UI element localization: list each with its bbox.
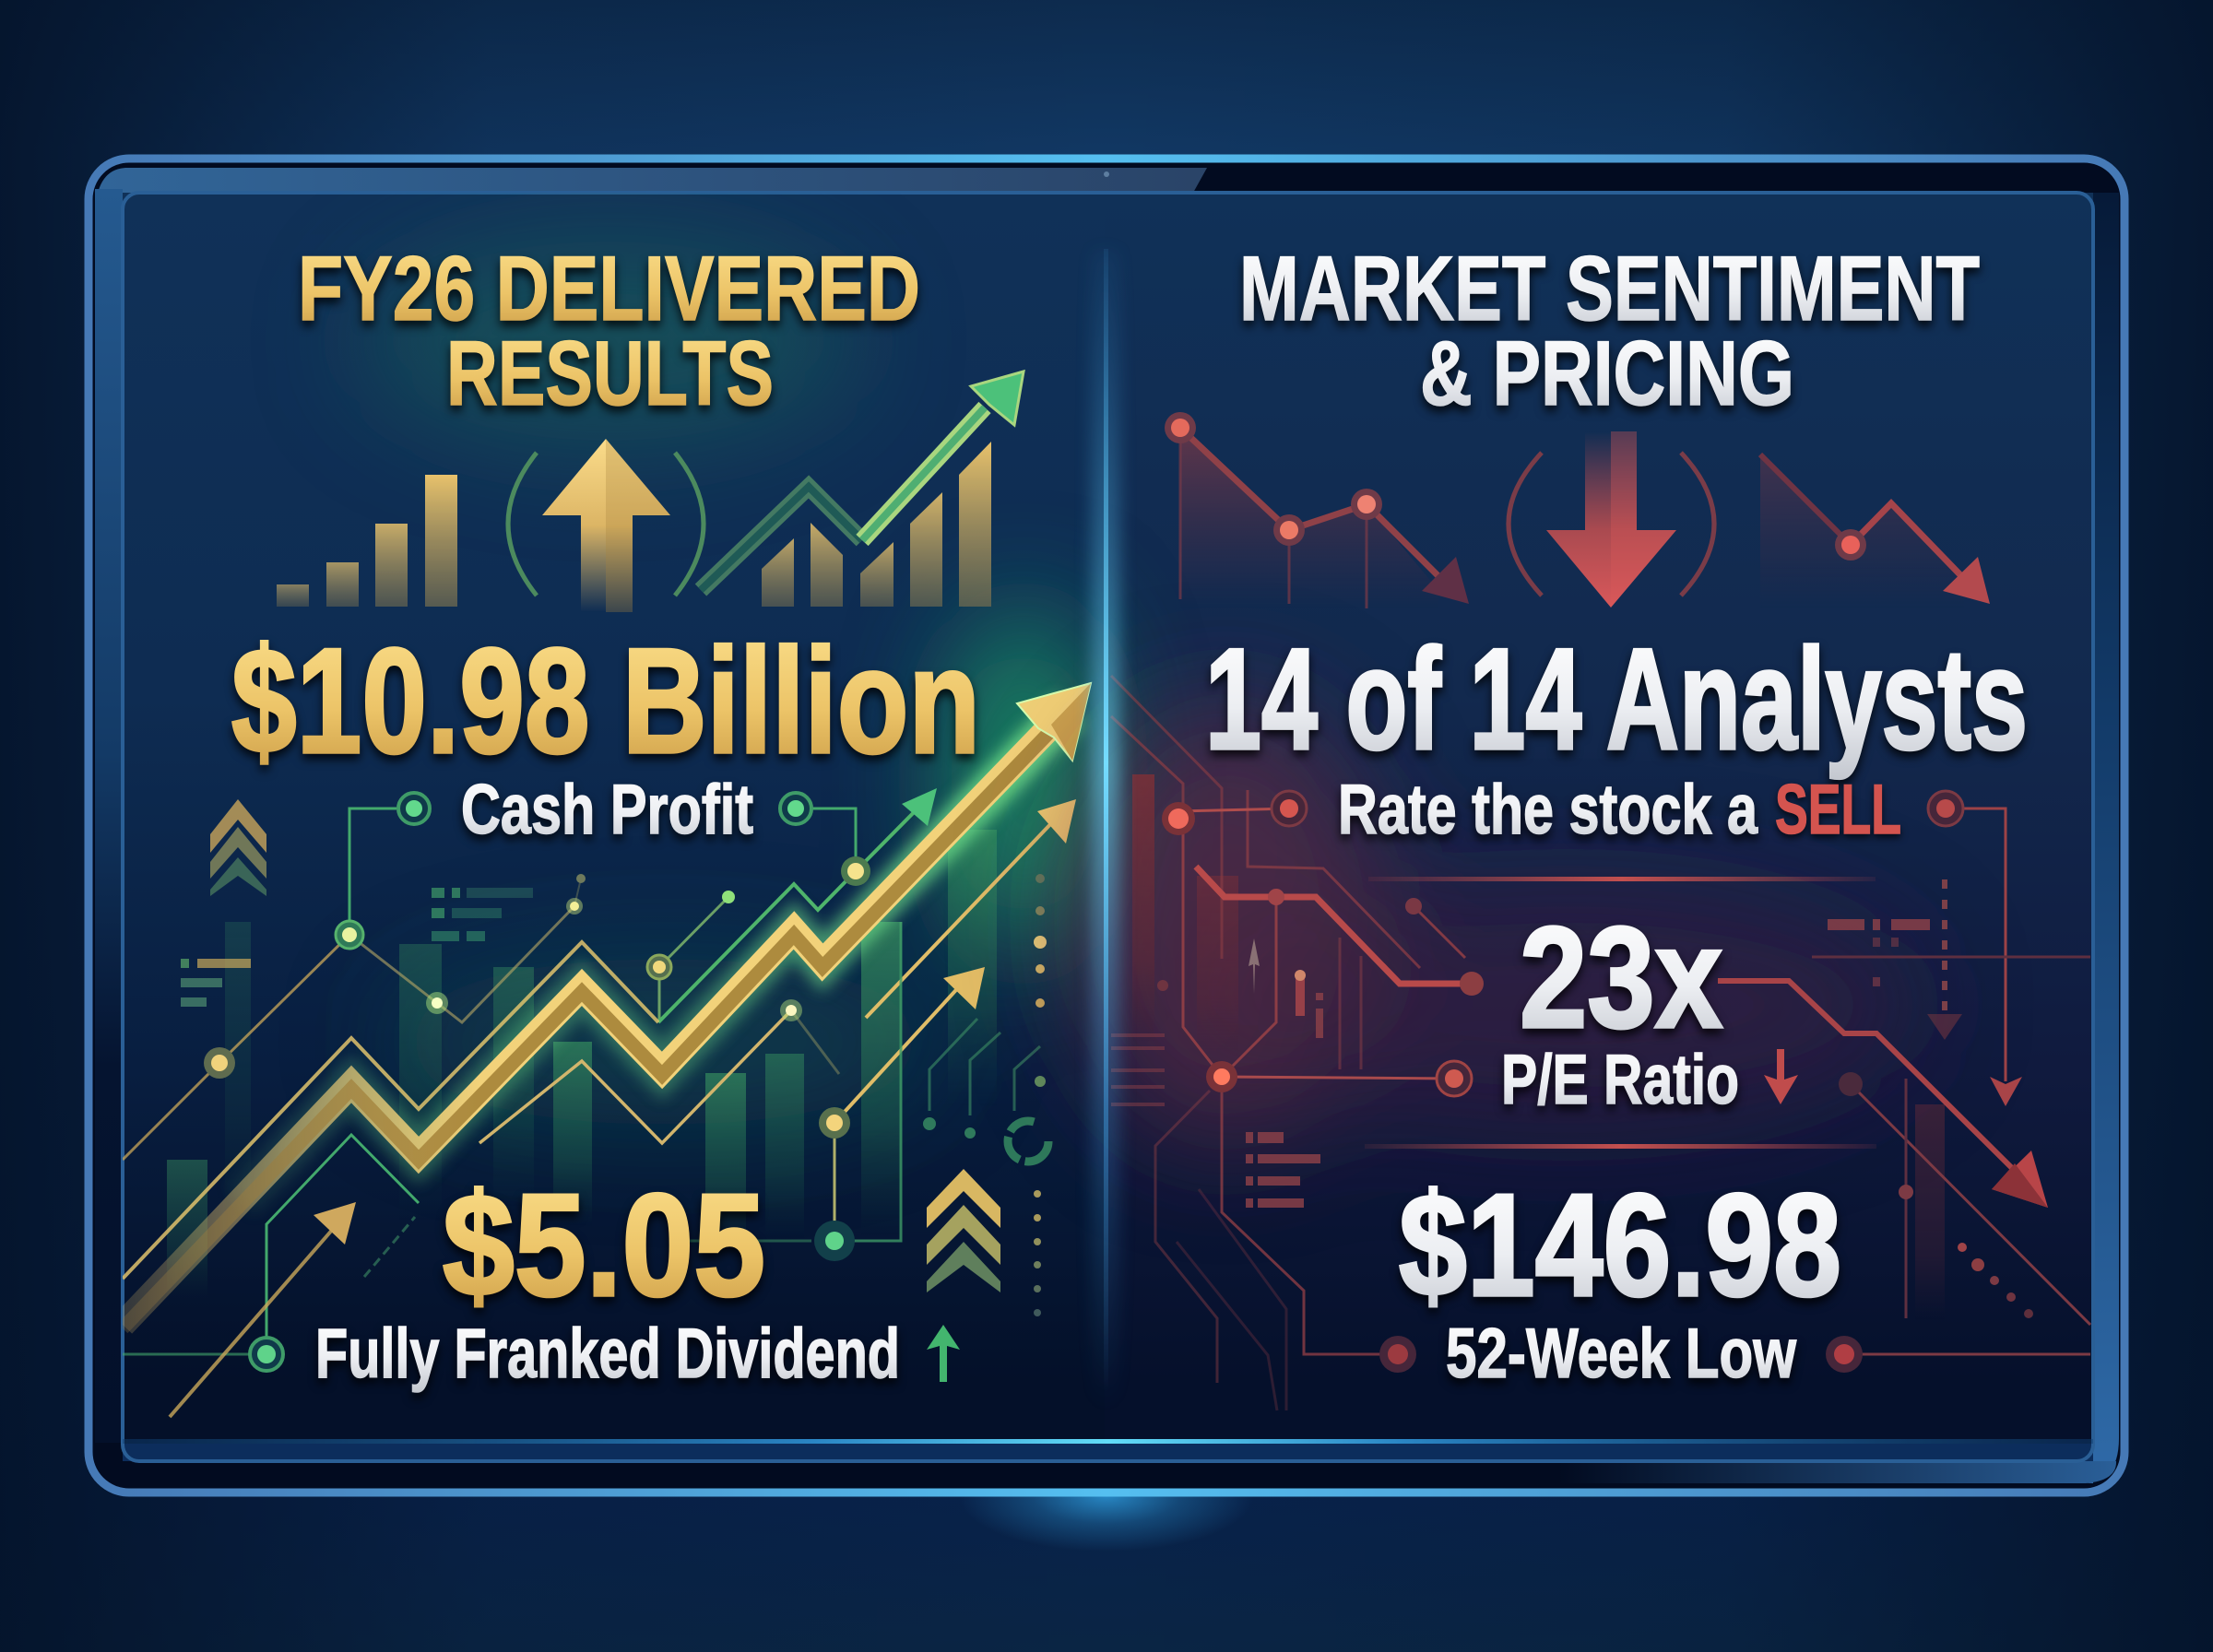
metric: fully franked dividend: Fully Franked Dividend — [315, 1315, 900, 1393]
small data marks — [1111, 919, 1930, 1208]
side dot columns — [923, 874, 1047, 1316]
panel: right sentiment — [1070, 676, 2090, 1410]
thin trend lines — [123, 795, 1056, 1417]
vertical red bars — [1132, 774, 1945, 1320]
icon: small green up arrow — [927, 1325, 960, 1382]
panel: left results — [123, 240, 1097, 1417]
icon: gold and green growth chart — [701, 372, 1024, 607]
donut — [1008, 1121, 1048, 1162]
title glow — [360, 240, 858, 442]
title: market sentiment and pricing: & PRICING — [1420, 322, 1794, 424]
thick red descending line — [1196, 867, 2048, 1208]
panel: screen background — [123, 193, 2093, 1461]
metric: cash profit — [231, 618, 980, 849]
metric: 52-week low: $146.98 — [1399, 1164, 1841, 1327]
metric: analysts rating: Rate the stock a — [1338, 771, 1758, 849]
icon: gold up arrow — [508, 439, 704, 612]
chevrons bottom right — [927, 1169, 1000, 1292]
metric: P/E ratio: P/E Ratio — [1501, 1041, 1739, 1119]
icon: falling chart left — [1165, 412, 1469, 608]
metric: analysts rating — [1205, 620, 2028, 849]
title: FY26 delivered results: FY26 DELIVERED — [298, 237, 920, 339]
metric: P/E ratio: 23x — [1520, 898, 1722, 1058]
metric: cash profit: $10.98 Billion — [231, 618, 980, 785]
metric: P/E ratio — [1501, 898, 1739, 1119]
title: market sentiment and pricing: MARKET SENTIMENT — [1239, 237, 1980, 339]
icon: small red down arrow — [1764, 1049, 1798, 1104]
red nodes — [1157, 791, 2033, 1373]
metric: fully franked dividend — [315, 1164, 900, 1393]
metric: analysts rating: SELL — [1775, 771, 1901, 849]
chart nodes — [204, 793, 870, 1371]
metric: cash profit: Cash Profit — [461, 771, 753, 849]
faint arrows — [1249, 938, 2022, 1106]
title: market sentiment and pricing — [1239, 237, 1980, 424]
small data marks — [181, 888, 533, 1007]
metric: 52-week low — [1399, 1164, 1841, 1393]
red glow — [1070, 701, 1918, 1143]
icon: gold rising bars — [277, 475, 457, 607]
metric: fully franked dividend: $5.05 — [443, 1164, 765, 1327]
title: FY26 delivered results — [298, 237, 920, 424]
bottom glow line — [123, 1439, 2093, 1444]
circuit lines — [1111, 676, 2090, 1410]
secondary arrow heads — [314, 788, 1076, 1245]
title: FY26 delivered results: RESULTS — [446, 322, 774, 424]
icon: red down arrow — [1509, 431, 1714, 608]
green chart glow — [387, 608, 1097, 1125]
centre divider — [1092, 249, 1119, 1410]
icon: falling chart right — [1760, 454, 1990, 608]
main gold zigzag arrow — [123, 683, 1091, 1328]
device frame — [89, 159, 2124, 1493]
background bars — [167, 830, 997, 1298]
chevrons top left — [210, 799, 266, 896]
metric: 52-week low: 52-Week Low — [1446, 1315, 1797, 1393]
red dividers — [1365, 877, 1876, 1149]
